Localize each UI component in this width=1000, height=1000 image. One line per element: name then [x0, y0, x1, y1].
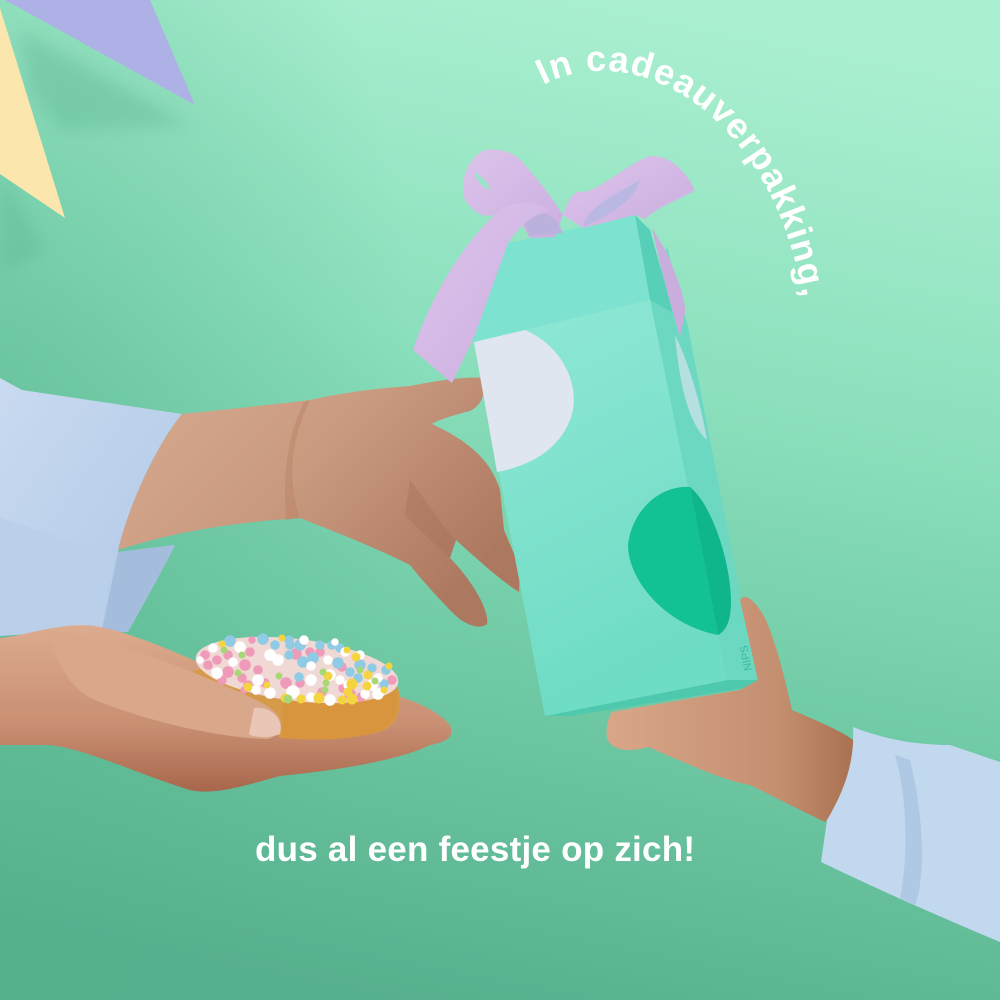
lid side — [635, 215, 673, 313]
lower hand with palm — [0, 625, 452, 792]
side white shape — [675, 335, 707, 440]
box bottom edge — [545, 680, 758, 716]
white circle on box — [474, 330, 574, 472]
small hand holding box — [607, 597, 853, 822]
right sleeve — [821, 727, 1000, 942]
ribbon bow — [413, 150, 695, 383]
sprinkles blue — [225, 634, 390, 688]
box side panel — [650, 247, 757, 684]
bottom caption: dus al een feestje op zich! — [255, 830, 695, 869]
box front — [474, 300, 728, 716]
lid front — [471, 215, 650, 342]
upper hand and arm — [118, 377, 520, 627]
left sleeve — [0, 378, 182, 636]
bunting flags — [0, 0, 195, 275]
sprinkles yellow — [219, 635, 392, 704]
green circle on front — [628, 487, 718, 635]
sprinkles white — [197, 636, 383, 705]
ribbon tail right — [652, 228, 685, 337]
rusk with sprinkles — [192, 627, 402, 740]
ribbon tail left — [413, 203, 552, 383]
green circle on side — [690, 487, 731, 635]
box edge text: NIPS — [738, 644, 755, 672]
gift box — [471, 215, 758, 716]
thumb over rusk — [50, 632, 281, 739]
sprinkles green — [221, 647, 378, 703]
curved heading: In cadeauverpakking, — [534, 52, 819, 296]
sprinkles pink — [201, 637, 396, 701]
